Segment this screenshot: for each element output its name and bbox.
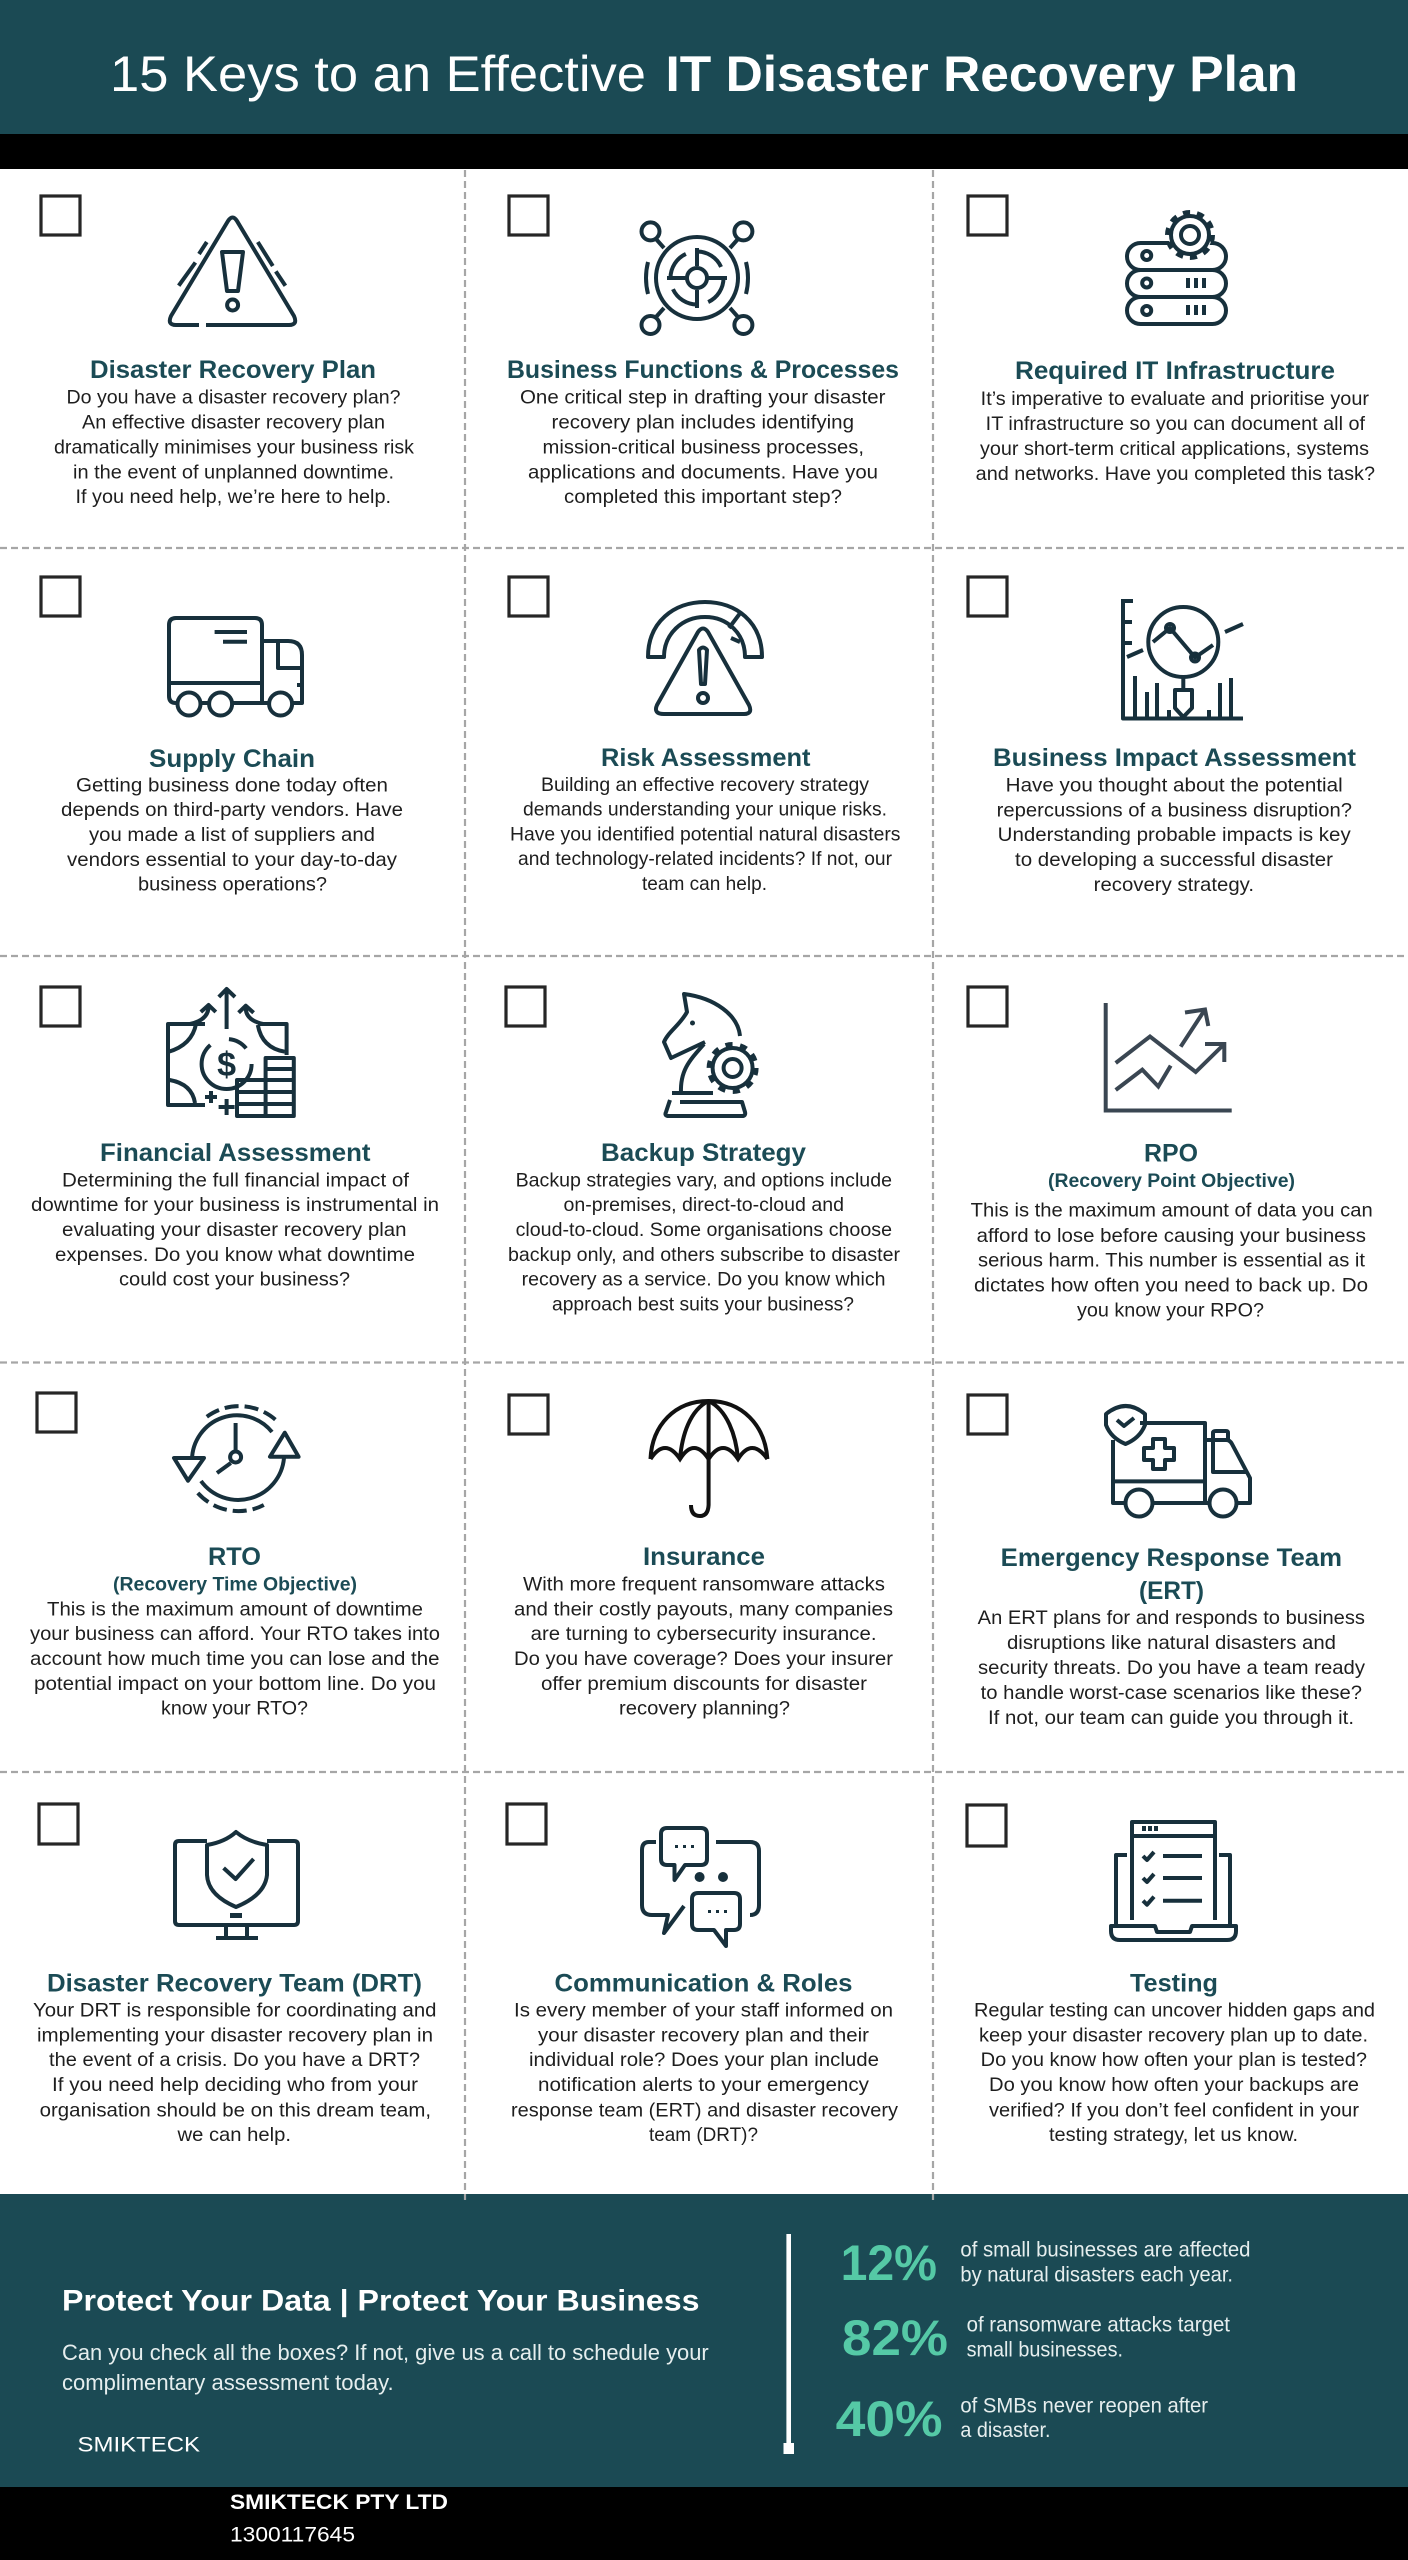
heading (1001, 1544, 1342, 1605)
stat: 40% (836, 2391, 1208, 2447)
body text: implementing your disaster recovery plan in (37, 2025, 433, 2047)
panel: emergency response team (935, 1364, 1408, 1771)
icon: monitor with shield (175, 1832, 298, 1938)
panel: RTO (0, 1364, 464, 1771)
body text (54, 386, 414, 508)
heading: Disaster Recovery Plan (90, 356, 376, 384)
body text: to handle worst-case scenarios like these? (981, 1682, 1362, 1704)
heading: Financial Assessment (100, 1139, 371, 1167)
body text: With more frequent ransomware attacks (523, 1574, 885, 1596)
body text: the event of a crisis. Do you have a DRT? (49, 2049, 420, 2071)
checkbox (967, 1805, 1006, 1846)
checkbox (507, 1804, 546, 1844)
icon: risk gauge with warning triangle (648, 602, 762, 714)
icon: money with growth arrows (168, 989, 294, 1116)
heading: Testing (1130, 1970, 1218, 1998)
title: IT Disaster Recovery Plan (666, 46, 1298, 102)
body text: evaluating your disaster recovery plan (62, 1219, 406, 1241)
checkbox (506, 987, 545, 1026)
body text: know your RTO? (161, 1698, 308, 1720)
body text: If you need help deciding who from your (52, 2074, 419, 2096)
body text (971, 1200, 1373, 1322)
stat: 12% (841, 2235, 1250, 2291)
icon: umbrella (650, 1401, 767, 1516)
body text: afford to lose before causing your business (977, 1225, 1366, 1247)
icon: target network (642, 222, 752, 334)
body text (30, 1599, 440, 1720)
stat: 82%: 82% (842, 2310, 948, 2366)
checkbox (509, 1395, 548, 1434)
panel: business impact assessment (935, 550, 1408, 955)
body text: depends on third-party vendors. Have (61, 799, 403, 821)
stat: 82%: small businesses. (967, 2339, 1123, 2362)
body text: recovery plan includes identifying (552, 412, 854, 434)
timeline bar (784, 2234, 794, 2454)
stat: 40%: 40% (836, 2391, 943, 2447)
body text: Understanding probable impacts is key (998, 824, 1351, 846)
body text: If not, our team can guide you through it. (988, 1707, 1354, 1729)
body text (520, 386, 886, 508)
body text: organisation should be on this dream team, (40, 2100, 431, 2122)
checkbox (41, 196, 80, 235)
body text: in the event of unplanned downtime. (73, 462, 394, 484)
contact bar (0, 2487, 1408, 2560)
checkbox (968, 577, 1007, 616)
stat: 12%: 12% (841, 2235, 937, 2291)
body text: you know your RPO? (1077, 1300, 1264, 1322)
stat: 40%: of SMBs never reopen after (960, 2394, 1208, 2417)
body text: could cost your business? (119, 1269, 350, 1291)
body text: applications and documents. Have you (528, 462, 878, 484)
icon: ambulance with shield (1106, 1406, 1250, 1516)
title: 15 Keys to an Effective (110, 46, 646, 102)
stat: 12%: by natural disasters each year. (960, 2264, 1233, 2287)
body text: This is the maximum amount of downtime (47, 1599, 423, 1621)
body text: Backup strategies vary, and options include (516, 1170, 892, 1192)
body text: disruptions like natural disasters and (1007, 1632, 1336, 1654)
heading: Emergency Response Team (1001, 1544, 1342, 1572)
checkbox (39, 1804, 78, 1844)
body text: demands understanding your unique risks. (523, 799, 887, 821)
icon: clock with cycle arrows (174, 1406, 299, 1511)
body text: An effective disaster recovery plan (82, 412, 385, 434)
checkbox (968, 987, 1007, 1026)
body text (974, 2000, 1375, 2146)
body text: Building an effective recovery strategy (541, 774, 869, 796)
checkbox (41, 577, 80, 616)
body text: IT infrastructure so you can document all of (986, 413, 1366, 435)
body text: serious harm. This number is essential as it (978, 1250, 1366, 1272)
body text: Getting business done today often (76, 774, 388, 796)
logo: SMIKTECK (78, 2434, 200, 2457)
body text: completed this important step? (564, 486, 842, 508)
panel: disaster recovery plan (0, 170, 464, 547)
footer text: Can you check all the boxes? If not, give us a call to schedule your (62, 2340, 709, 2365)
body text: on-premises, direct-to-cloud and (564, 1194, 844, 1216)
icon: chat bubbles (642, 1828, 759, 1946)
heading: RPO (1144, 1140, 1198, 1168)
body text: testing strategy, let us know. (1049, 2124, 1298, 2146)
stat: 12%: of small businesses are affected (960, 2239, 1250, 2262)
body text: downtime for your business is instrumental in (31, 1194, 439, 1216)
body text: cloud-to-cloud. Some organisations choose (516, 1219, 892, 1241)
heading: RTO (208, 1543, 261, 1571)
icon: line chart with arrows (1106, 1003, 1232, 1110)
body text: your disaster recovery plan and their (538, 2025, 870, 2047)
heading: Backup Strategy (601, 1139, 806, 1167)
body text: This is the maximum amount of data you can (971, 1200, 1373, 1222)
title (110, 46, 1298, 102)
body text (511, 2000, 898, 2146)
footer panel (0, 2194, 1408, 2487)
checkbox (37, 1393, 76, 1432)
body text: to developing a successful disaster (1015, 849, 1334, 871)
company name: SMIKTECK PTY LTD (230, 2490, 448, 2514)
checkbox (968, 196, 1007, 235)
body text: backup only, and others subscribe to disaster (508, 1244, 901, 1266)
body text: offer premium discounts for disaster (541, 1673, 868, 1695)
body text: recovery strategy. (1094, 874, 1254, 896)
body text: business operations? (138, 874, 327, 896)
heading: Business Functions & Processes (507, 356, 899, 384)
body text: mission-critical business processes, (542, 436, 864, 458)
heading: Communication & Roles (554, 1970, 852, 1998)
body text (33, 2000, 436, 2146)
icon: chess knight with gear (664, 994, 756, 1116)
phone number: 1300117645 (230, 2523, 355, 2547)
panel: financial assessment (0, 958, 464, 1361)
body text (978, 1607, 1365, 1729)
body text: Do you know how often your plan is tested? (981, 2049, 1367, 2071)
icon: money with growth arrows: $ (217, 1046, 236, 1084)
heading: Business Impact Assessment (993, 744, 1357, 772)
body text: notification alerts to your emergency (538, 2074, 869, 2096)
body text: account how much time you can lose and the (30, 1648, 440, 1670)
heading: Required IT Infrastructure (1015, 357, 1335, 385)
stat: 82% (842, 2310, 1230, 2366)
body text: repercussions of a business disruption? (997, 800, 1352, 822)
body text: are turning to cybersecurity insurance. (531, 1623, 876, 1645)
icon: delivery truck (169, 618, 302, 716)
body text: we can help. (176, 2124, 291, 2146)
body text: recovery as a service. Do you know which (522, 1269, 886, 1291)
body text: expenses. Do you know what downtime (55, 1244, 415, 1266)
body text: team (DRT)? (649, 2124, 758, 2146)
body text (61, 774, 403, 896)
panel: communication and roles (466, 1774, 932, 2194)
heading: (ERT) (1139, 1577, 1204, 1605)
panel: insurance (466, 1364, 932, 1771)
heading: Supply Chain (149, 745, 315, 773)
body text: Have you identified potential natural disasters (510, 824, 901, 846)
body text: If you need help, we’re here to help. (76, 486, 391, 508)
icon: laptop checklist (1111, 1822, 1236, 1940)
body text: and their costly payouts, many companies (514, 1599, 893, 1621)
body text: keep your disaster recovery plan up to date. (979, 2025, 1368, 2047)
header banner (0, 0, 1408, 134)
subheading: (Recovery Point Objective) (1048, 1171, 1295, 1192)
body text: individual role? Does your plan include (529, 2049, 879, 2071)
checkbox (509, 196, 548, 235)
body text: dramatically minimises your business risk (54, 436, 414, 458)
stat: 40%: a disaster. (960, 2419, 1050, 2442)
body text (997, 774, 1352, 896)
footer text: complimentary assessment today. (62, 2370, 394, 2395)
panel: disaster recovery team (0, 1774, 464, 2194)
body text: recovery planning? (619, 1698, 790, 1720)
body text: Regular testing can uncover hidden gaps and (974, 2000, 1375, 2022)
body text: Do you know how often your backups are (989, 2074, 1359, 2096)
icon: warning triangle (170, 218, 295, 325)
body text: One critical step in drafting your disaster (520, 386, 886, 408)
body text: you made a list of suppliers and (89, 824, 375, 846)
body text: response team (ERT) and disaster recovery (511, 2100, 898, 2122)
subheading: (Recovery Time Objective) (113, 1575, 357, 1596)
panel: backup strategy (466, 958, 932, 1361)
heading: Risk Assessment (601, 744, 811, 772)
body text (514, 1574, 894, 1720)
body text: team can help. (642, 873, 767, 895)
body text: your business can afford. Your RTO takes into (30, 1623, 440, 1645)
body text: verified? If you don’t feel confident in your (989, 2100, 1360, 2122)
body text: vendors essential to your day-to-day (67, 849, 397, 871)
footer heading: Protect Your Data | Protect Your Business (62, 2285, 700, 2318)
body text: Determining the full financial impact of (62, 1170, 410, 1192)
body text: Your DRT is responsible for coordinating and (33, 2000, 436, 2022)
body text: dictates how often you need to back up. Do (974, 1275, 1368, 1297)
icon: magnifier over bar chart (1123, 599, 1243, 718)
panel: risk assessment (466, 550, 932, 955)
checkbox (509, 577, 548, 616)
checkbox (968, 1395, 1007, 1434)
heading: Insurance (643, 1543, 765, 1571)
stat: 82%: of ransomware attacks target (967, 2314, 1230, 2337)
body text: security threats. Do you have a team ready (978, 1657, 1365, 1679)
body text: It’s imperative to evaluate and prioritise your (981, 388, 1370, 410)
panel: RPO (935, 958, 1408, 1361)
body text (510, 774, 901, 895)
body text: and networks. Have you completed this task? (976, 463, 1375, 485)
panel: supply chain (0, 550, 464, 955)
heading: Disaster Recovery Team (DRT) (47, 1970, 422, 1998)
icon: server stack with gear (1127, 213, 1226, 324)
footer text (62, 2340, 709, 2395)
body text (976, 388, 1375, 485)
body text: Do you have coverage? Does your insurer (514, 1648, 894, 1670)
panel: testing (935, 1774, 1408, 2194)
panel: business functions and processes (466, 170, 932, 547)
body text: potential impact on your bottom line. Do you (34, 1673, 436, 1695)
body text (31, 1170, 439, 1291)
body text: Do you have a disaster recovery plan? (66, 386, 401, 408)
body text: Is every member of your staff informed on (514, 2000, 893, 2022)
body text: your short-term critical applications, systems (980, 438, 1369, 460)
checkbox (41, 987, 80, 1026)
body text: Have you thought about the potential (1006, 774, 1343, 796)
panel: required IT infrastructure (935, 170, 1408, 547)
body text: and technology-related incidents? If not, our (518, 848, 892, 870)
body text (508, 1170, 901, 1316)
body text: approach best suits your business? (552, 1294, 854, 1316)
body text: An ERT plans for and responds to business (978, 1607, 1365, 1629)
